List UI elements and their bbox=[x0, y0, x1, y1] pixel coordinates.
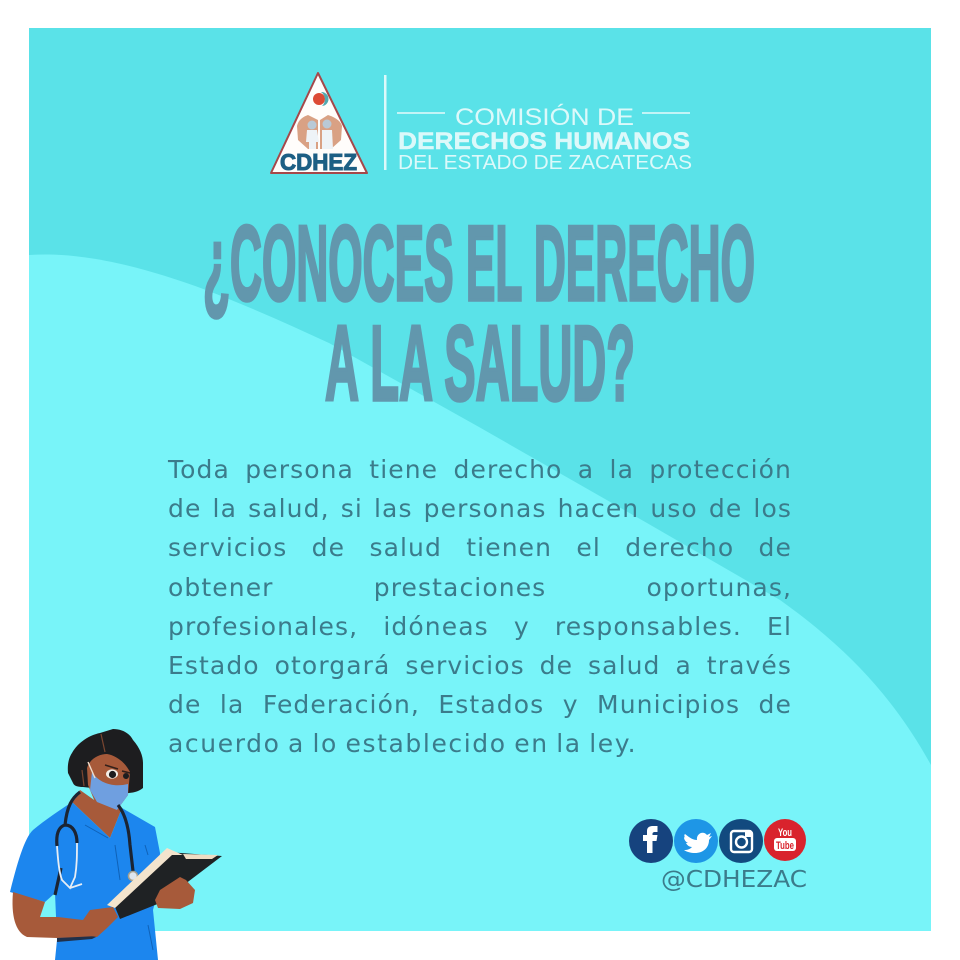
title bbox=[203, 203, 755, 423]
icon: instagram bbox=[719, 819, 763, 863]
body text bbox=[168, 455, 792, 758]
face bbox=[87, 754, 130, 810]
paper edge bbox=[107, 848, 183, 908]
neck and chest bbox=[72, 790, 122, 838]
social icons bbox=[629, 819, 806, 863]
body text: Toda persona tiene derecho a la protección bbox=[168, 455, 792, 484]
body text: acuerdo a lo establecido en la ley. bbox=[168, 729, 637, 758]
organisation name bbox=[397, 104, 692, 174]
social handle: @CDHEZAC bbox=[661, 867, 807, 893]
icon: youtube bbox=[764, 819, 806, 861]
body text: de la salud, si las personas hacen uso de los bbox=[168, 494, 792, 523]
scrub fold lines bbox=[85, 825, 153, 950]
nurse illustration bbox=[10, 729, 222, 960]
icon: youtube: You bbox=[778, 827, 792, 839]
scrub top bbox=[10, 802, 160, 960]
stethoscope bbox=[55, 792, 133, 895]
icon: youtube: Tube bbox=[776, 840, 794, 852]
clip bbox=[183, 854, 218, 859]
arm bbox=[13, 892, 97, 938]
icon: twitter bbox=[674, 819, 718, 863]
logo divider bbox=[384, 75, 386, 170]
eyes bbox=[105, 765, 130, 779]
hair streak bbox=[82, 734, 105, 786]
body text: obtener prestaciones oportunas, bbox=[168, 573, 792, 602]
body text: de la Federación, Estados y Municipios de bbox=[168, 690, 792, 719]
organisation name: DEL ESTADO DE ZACATECAS bbox=[398, 152, 692, 174]
organisation name: COMISIÓN DE bbox=[455, 104, 634, 131]
body text: servicios de salud tienen el derecho de bbox=[168, 533, 792, 562]
organisation name: DERECHOS HUMANOS bbox=[398, 128, 690, 155]
logo: CDHEZ triangle bbox=[271, 73, 367, 175]
face mask bbox=[90, 772, 128, 810]
logo: CDHEZ triangle: CDHEZ bbox=[280, 149, 357, 175]
clipboard bbox=[115, 852, 222, 919]
left hand bbox=[83, 907, 118, 937]
right hand bbox=[155, 877, 195, 909]
body text: profesionales, idóneas y responsables. El bbox=[168, 612, 792, 641]
icon: facebook bbox=[629, 819, 673, 863]
body text: Estado otorgará servicios de salud a través bbox=[168, 651, 792, 680]
cuff shadow bbox=[57, 936, 98, 942]
hair bbox=[68, 729, 143, 793]
